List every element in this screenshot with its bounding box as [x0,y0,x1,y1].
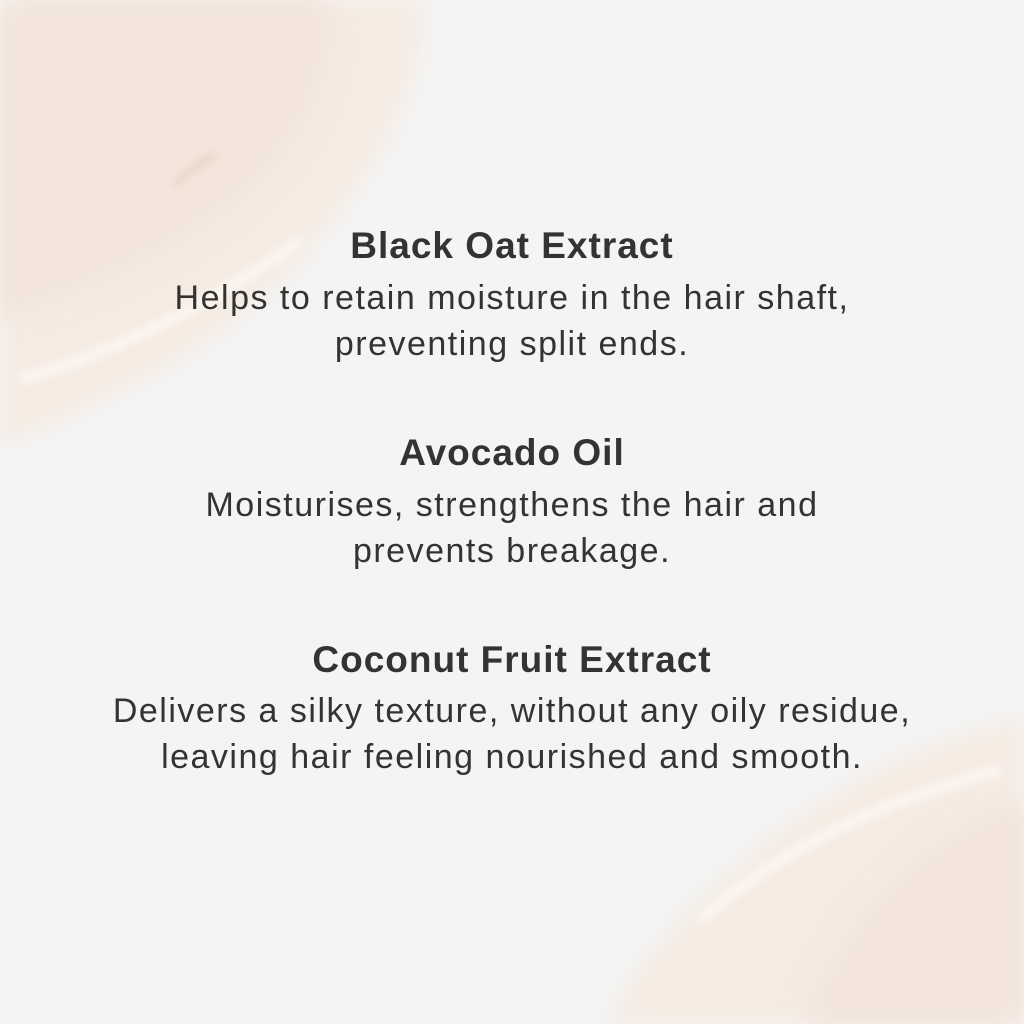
text block: preventing split ends. [335,325,689,363]
section: Coconut Fruit Extract [113,639,911,776]
section: Black Oat Extract [175,225,849,363]
heading: Black Oat Extract [350,225,674,266]
text block: Delivers a silky texture, without any oily residue, [113,692,911,730]
text block [113,692,911,776]
heading: Avocado Oil [399,432,625,473]
text block: Helps to retain moisture in the hair shaft, [175,279,849,317]
heading: Coconut Fruit Extract [312,639,712,680]
text block: leaving hair feeling nourished and smooth. [161,738,863,776]
text block [175,279,849,363]
smear: top-left [0,0,421,445]
text block: prevents breakage. [353,532,671,570]
section: Avocado Oil [205,432,818,570]
text block: Moisturises, strengthens the hair and [205,486,818,524]
text block [205,486,818,570]
smear: bottom-right [610,720,1024,1024]
